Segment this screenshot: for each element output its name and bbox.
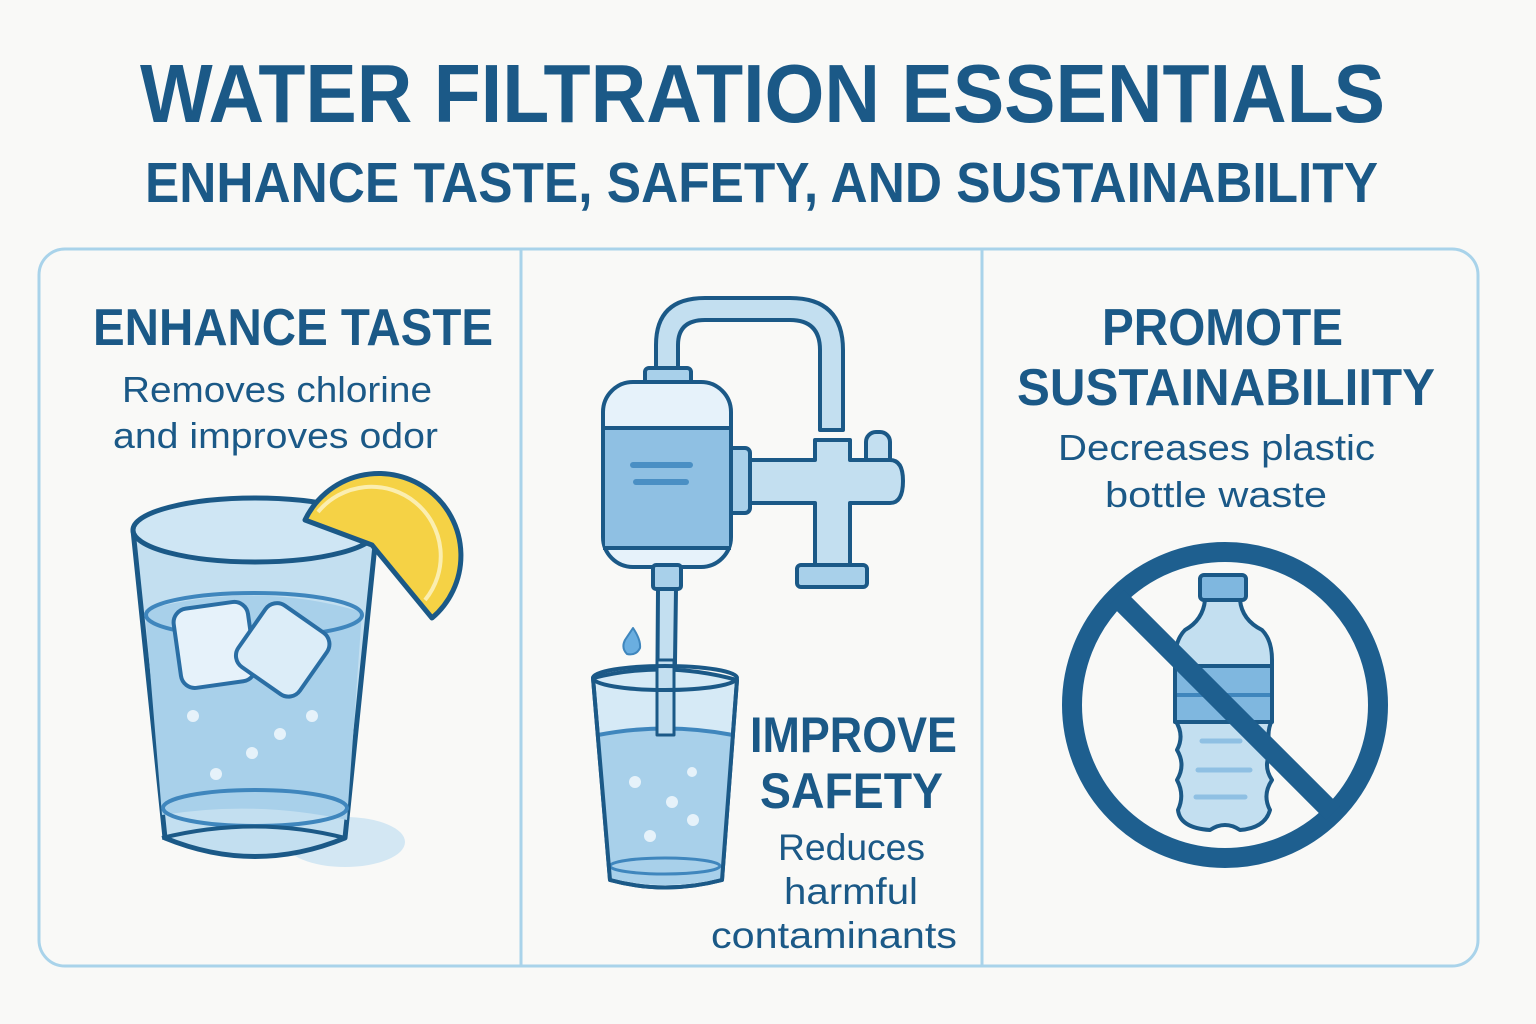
subtitle: ENHANCE TASTE, SAFETY, AND SUSTAINABILITY xyxy=(145,151,1378,215)
heading: promote sustainability: PROMOTE xyxy=(1102,299,1343,357)
text: sustainability description: Decreases plastic xyxy=(1058,427,1375,468)
heading: promote sustainability xyxy=(1017,299,1435,417)
text: safety description xyxy=(711,827,957,956)
heading: improve safety: IMPROVE xyxy=(750,707,957,763)
heading: improve safety: SAFETY xyxy=(760,763,943,819)
text: safety description: contaminants xyxy=(711,915,957,956)
text: taste description: and improves odor xyxy=(113,415,438,456)
text: safety description: Reduces xyxy=(778,827,925,868)
main panel frame xyxy=(39,249,1478,966)
panel: enhance taste xyxy=(93,299,493,867)
text: taste description xyxy=(113,369,438,456)
text: taste description: Removes chlorine xyxy=(122,369,432,410)
icon: faucet with filter xyxy=(593,298,903,888)
text: safety description: harmful xyxy=(784,871,918,912)
heading: improve safety xyxy=(750,707,957,819)
title: WATER FILTRATION ESSENTIALS xyxy=(140,47,1385,140)
icon: glass of water with lemon xyxy=(133,474,461,867)
text: sustainability description xyxy=(1058,427,1375,515)
panel: promote sustainability xyxy=(1017,299,1435,858)
icon: no plastic bottle xyxy=(1072,552,1378,858)
panel: improve safety xyxy=(593,298,957,956)
text: sustainability description: bottle waste xyxy=(1105,474,1327,515)
heading: promote sustainability: SUSTAINABILIITY xyxy=(1017,359,1435,417)
heading: enhance taste: ENHANCE TASTE xyxy=(93,299,493,357)
